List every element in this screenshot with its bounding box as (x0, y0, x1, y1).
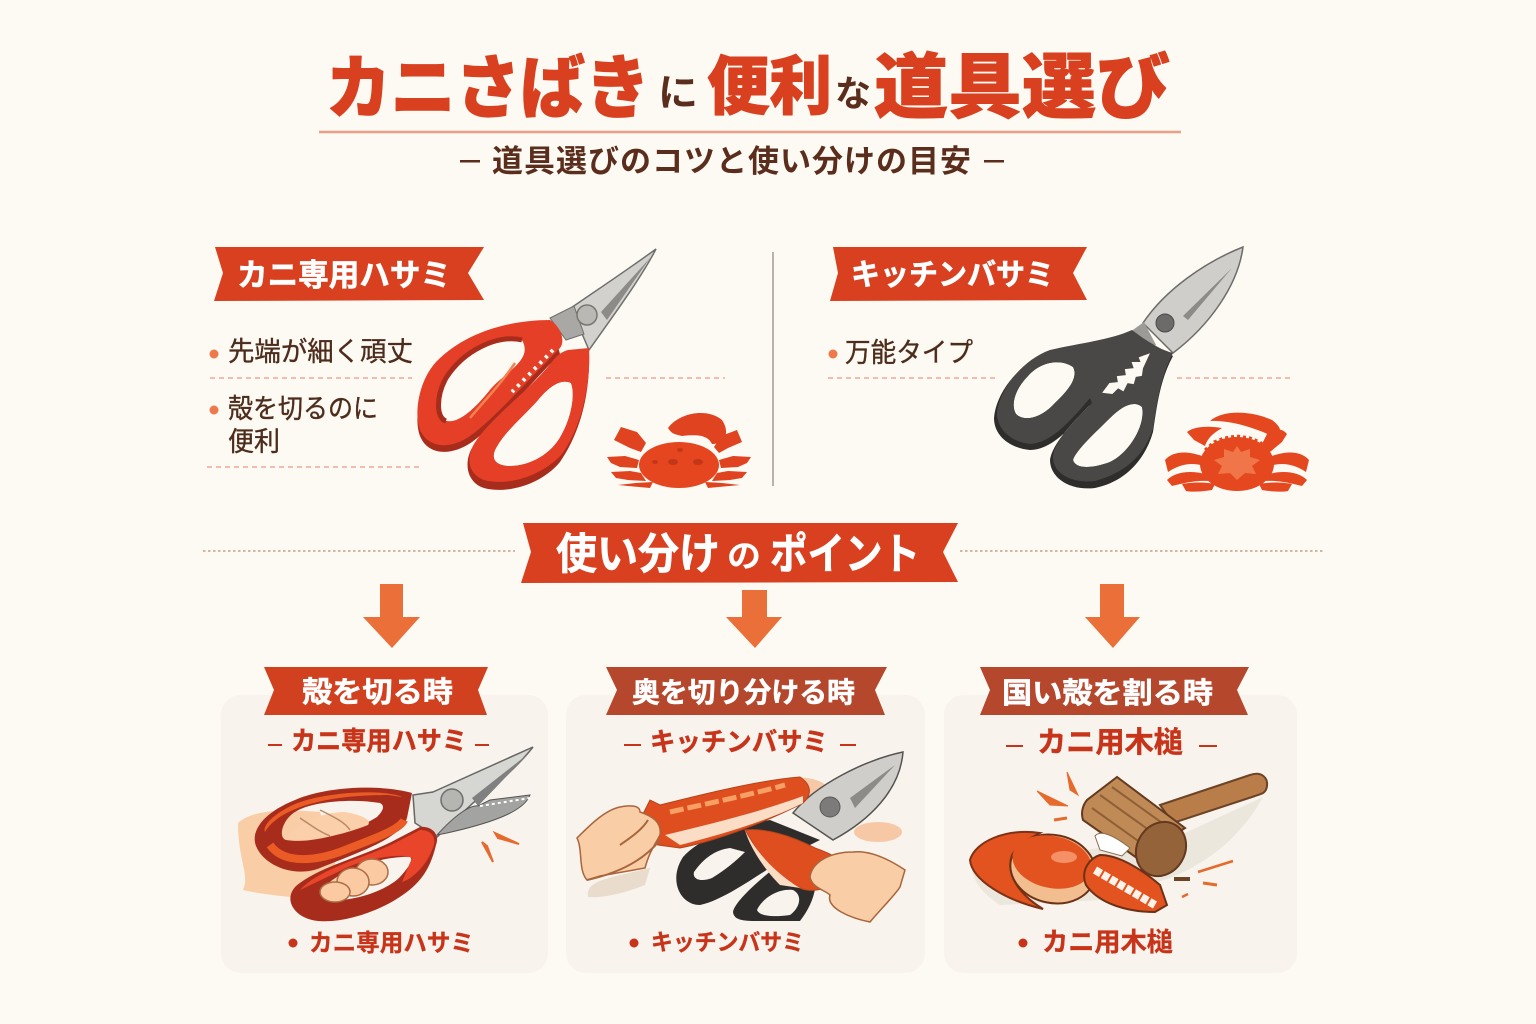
feature list: crab scissors: 殻を切るのに (228, 394, 378, 424)
arrow: left (363, 584, 420, 648)
icon: kitchen scissors (994, 247, 1243, 488)
feature list: crab scissors: 先端が細く頑丈 (228, 337, 413, 367)
ribbon: breaking hard shell (980, 667, 1249, 715)
icon: red crab (607, 413, 751, 488)
ribbon: carving meat: 奥を切り分ける時 (632, 677, 855, 708)
icon: snow crab (1165, 413, 1309, 492)
arrow: right (1085, 584, 1140, 648)
arrow: middle (726, 590, 782, 648)
title: 便利 (707, 51, 832, 123)
title: カニさばき (326, 50, 650, 127)
panel: crab scissors (207, 247, 751, 490)
tool label: crab mallet: カニ用木槌 (1042, 927, 1173, 957)
feature list: kitchen scissors (828, 338, 1292, 378)
title (326, 49, 1170, 128)
tool name: crab mallet: カニ用木槌 (1037, 726, 1183, 759)
ribbon: carving meat (606, 667, 887, 715)
illustration: mallet and crab (970, 772, 1267, 912)
title: 道具選び (874, 49, 1170, 128)
panel: breaking hard shell (944, 667, 1297, 973)
ribbon heading: kitchen scissors: キッチンバサミ (851, 259, 1054, 292)
tool label: crab scissors: カニ専用ハサミ (309, 930, 474, 957)
section heading: usage points (203, 523, 1325, 583)
divider between tools (772, 252, 774, 486)
subtitle: 道具選びのコツと使い分けの目安 (492, 144, 971, 179)
tool label: kitchen scissors: キッチンバサミ (651, 929, 804, 955)
ribbon heading: crab scissors: カニ専用ハサミ (237, 258, 451, 293)
panel: cutting shell (221, 667, 548, 973)
tool name: crab scissors: カニ専用ハサミ (291, 726, 467, 756)
title: な (835, 73, 871, 114)
ribbon: breaking hard shell: 国い殻を割る時 (1002, 677, 1213, 710)
feature list: kitchen scissors: 万能タイプ (845, 338, 973, 368)
section heading: usage points: ポイント (770, 531, 920, 579)
ribbon: cutting shell (264, 667, 488, 715)
feature list: crab scissors (207, 337, 725, 467)
section heading: usage points: の (727, 538, 761, 574)
ribbon: cutting shell: 殻を切る時 (302, 676, 453, 709)
section heading: usage points: 使い分け (556, 531, 720, 579)
tool name: kitchen scissors: キッチンバサミ (650, 727, 828, 757)
illustration: scissors cutting shell (238, 747, 533, 921)
ribbon heading: crab scissors (214, 247, 484, 301)
feature list: crab scissors: 便利 (228, 427, 280, 457)
panel: carving meat (566, 667, 925, 973)
illustration: scissors with crab leg (577, 752, 905, 922)
icon: red crab scissors (417, 249, 656, 490)
ribbon heading: kitchen scissors (830, 247, 1087, 301)
panel: kitchen scissors (828, 247, 1309, 492)
title: に (658, 73, 698, 115)
